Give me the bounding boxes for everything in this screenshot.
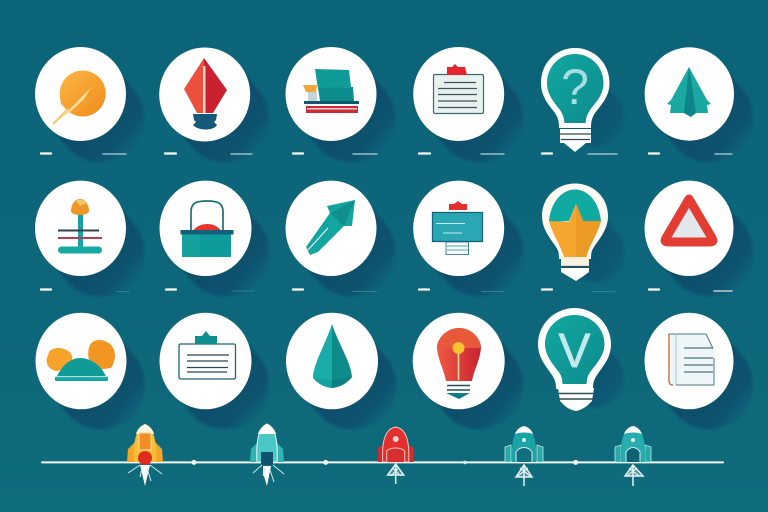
timeline line bbox=[41, 460, 724, 465]
rocket: orange bbox=[127, 424, 163, 486]
icon: question mark light bulb: ? bbox=[561, 59, 589, 115]
icon: red warning triangle bbox=[644, 181, 734, 276]
rocket: red bbox=[378, 427, 414, 484]
icon: pin on stacked lines bbox=[35, 181, 126, 276]
icon: question mark light bulb bbox=[541, 48, 610, 152]
rocket: teal 5 bbox=[615, 426, 651, 486]
row 2 dashes bbox=[41, 290, 732, 292]
icon: hills with dome bbox=[36, 313, 126, 409]
rocket: teal with navy nozzle bbox=[250, 424, 284, 486]
icon: framed note with clip bbox=[160, 313, 252, 409]
icon: monitor sign bbox=[413, 181, 504, 276]
icon: letter V light bulb bbox=[538, 308, 611, 411]
icon: diagonal teal arrow bbox=[286, 181, 376, 276]
icon: teal tent / tree bbox=[645, 47, 734, 141]
icon: stacked books bbox=[286, 47, 376, 141]
icon: teal sail bbox=[286, 313, 378, 409]
icon: folded document bbox=[644, 313, 734, 409]
icon: red pen nib bbox=[159, 48, 250, 142]
icon: letter V light bulb: V bbox=[558, 325, 591, 378]
icon: clipboard note bbox=[413, 47, 504, 141]
icon: teal basket with red contents bbox=[160, 181, 252, 276]
row 1 dashes bbox=[41, 152, 732, 155]
icon: orange ball with quill bbox=[35, 47, 126, 141]
icon: red light bulb bbox=[413, 313, 505, 409]
rocket: teal 4 bbox=[505, 426, 543, 486]
icon: teal and orange light bulb bbox=[542, 184, 608, 281]
long shadows of the icons bbox=[80, 90, 709, 385]
